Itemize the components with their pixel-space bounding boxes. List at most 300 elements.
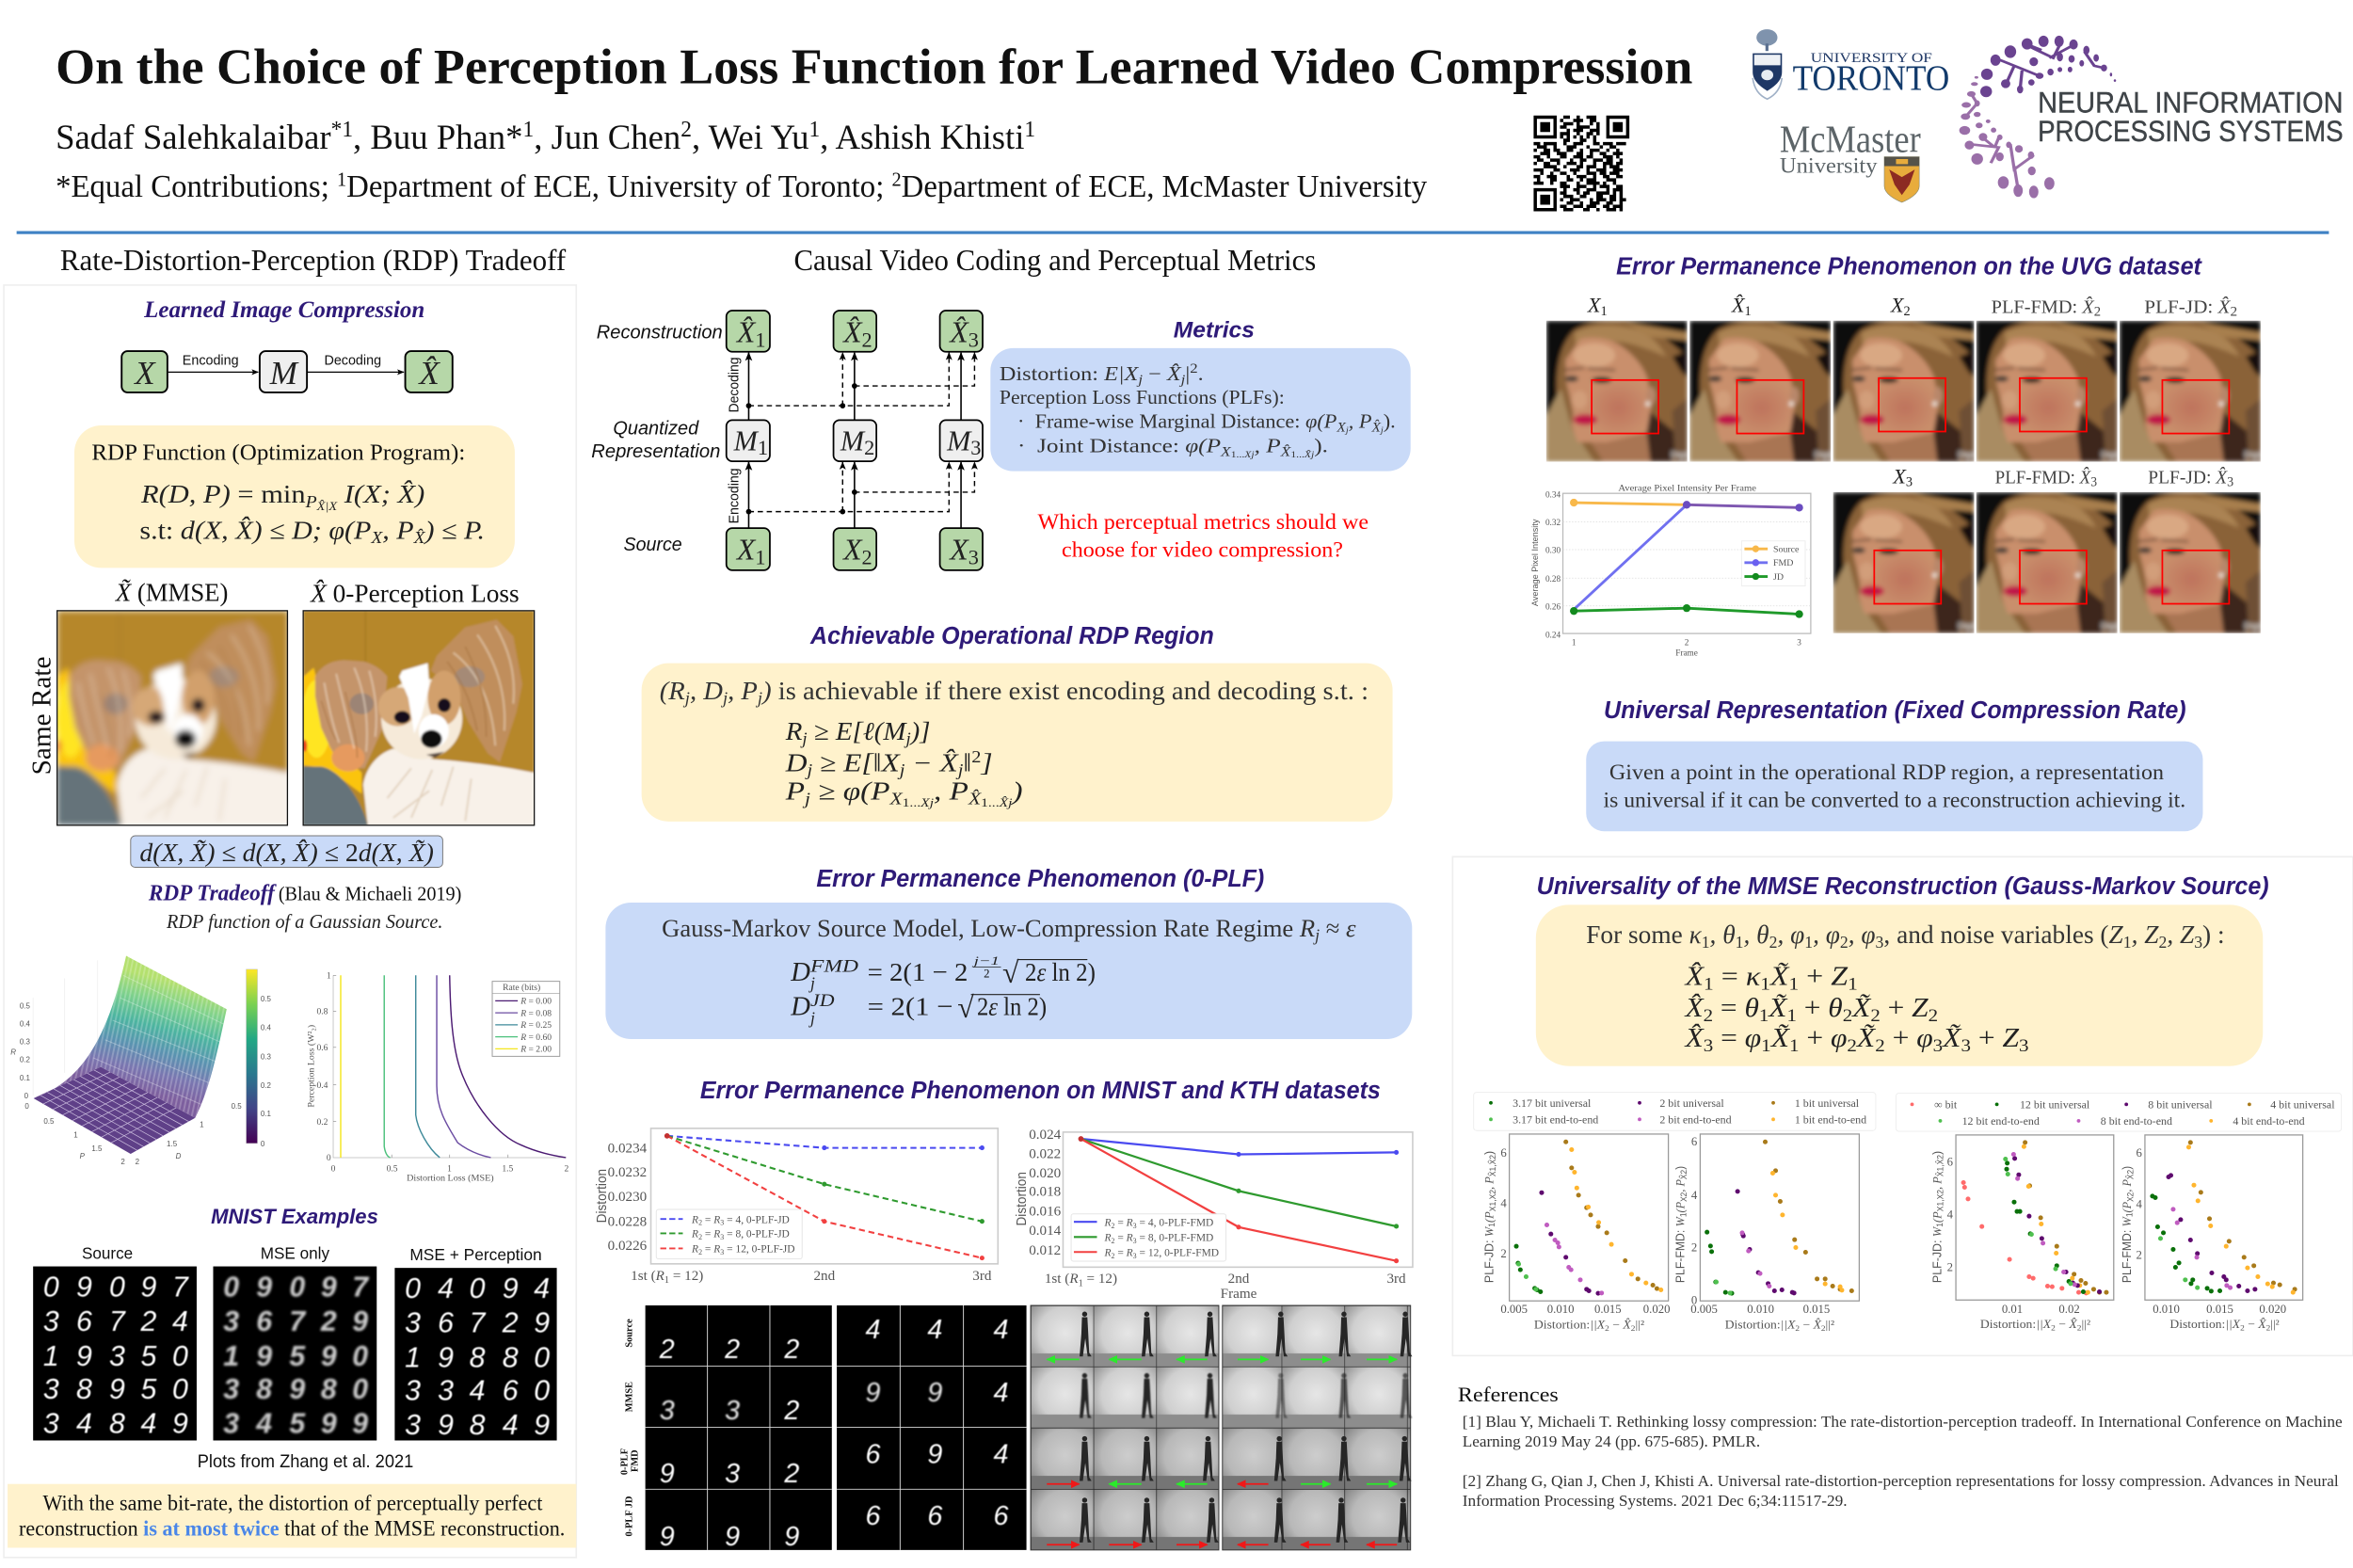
callout: RDP function: I(X; X̂)	[337, 480, 424, 508]
chart: distortion FMD: 1	[1079, 1278, 1083, 1288]
chart: average pixel intensity: 0.26	[1545, 601, 1561, 611]
chart: scatter JD left: 0.015	[1594, 1303, 1622, 1316]
label: MMSE image: X̃ (MMSE)	[115, 579, 228, 607]
colorbar: 0.5	[261, 995, 272, 1003]
panel: rate-distortion-perception tradeoff	[4, 285, 576, 1558]
chart: distortion perception curves: R = 0.60	[520, 1032, 552, 1043]
diagram: causal video coding: X	[950, 534, 968, 567]
colorbar: 0.3	[261, 1053, 272, 1062]
chart: scatter FMD right: 2	[2137, 1249, 2142, 1262]
chart: scatter JD left: 4	[1500, 1197, 1507, 1210]
callout: metrics: , P	[1255, 437, 1281, 457]
chart: 3D RDP surface: P	[80, 1152, 86, 1160]
chart: distortion perception curves: 0.8	[316, 1007, 328, 1017]
chart: scatter FMD right: 1	[2125, 1212, 2135, 1217]
chart: distortion FMD: R	[1103, 1247, 1111, 1258]
image: MNIST sequences left: 222	[659, 1335, 799, 1365]
callout: gauss-markov universality: X̂	[1685, 962, 1702, 992]
chart: distortion FMD: 2nd	[1228, 1272, 1250, 1287]
callout: gauss-markov universality: =	[1713, 1023, 1745, 1053]
logo: McMaster University: University	[1780, 152, 1878, 177]
chart: scatter FMD left: −	[1800, 1319, 1814, 1332]
callout: gauss-markov: 2ε ln 2)	[977, 993, 1047, 1022]
chart: scatter JD right: 2	[2051, 1322, 2056, 1332]
diagram: encoder decoder	[121, 351, 453, 392]
callout: gauss-markov universality: +	[1885, 1023, 1916, 1053]
question in red: choose for video compression?	[1062, 536, 1343, 561]
diagram: encoder decoder: X̂	[417, 355, 440, 392]
image: MNIST source grid: 19350	[43, 1341, 188, 1372]
row labels for image grid: 0-PLF JD	[624, 1496, 634, 1537]
chart: distortion JD: 2	[698, 1233, 702, 1241]
chart: distortion FMD: 0.018	[1029, 1185, 1061, 1200]
heading: RDP tradeoff: RDP Tradeoff	[148, 882, 277, 906]
diagram: encoder decoder: M	[269, 355, 299, 392]
chart: average pixel intensity: Average Pixel Intensity Per Frame	[1618, 483, 1757, 493]
callout: metrics: X	[1220, 445, 1232, 460]
chart: scatter FMD left: 0.010	[1747, 1303, 1774, 1316]
QR code	[1533, 116, 1629, 211]
chart: scatter JD left: 2	[1500, 1247, 1507, 1260]
authors: 2	[680, 118, 692, 142]
question in red: Which perceptual metrics should we	[1038, 509, 1369, 534]
panel: universality of the MMSE reconstruction	[1452, 856, 2353, 1355]
chart: distortion JD: 2nd	[813, 1269, 836, 1284]
chart: scatter FMD right	[2120, 1135, 2303, 1332]
chart: scatter JD right	[1929, 1135, 2114, 1332]
formula: distortion bound: d(X, X̃) ≤ d(X, X̂) ≤ 2d(X, X̃)	[139, 839, 434, 867]
chart: distortion JD: 0.0232	[608, 1165, 647, 1180]
callout: gauss-markov universality: 2	[1843, 1006, 1852, 1026]
diagram: causal video coding: Source	[624, 535, 682, 555]
image labels row one: PLF-FMD: X̂	[1992, 296, 2093, 317]
chart: distortion perception curves: R = 0.00	[520, 997, 552, 1007]
chart: distortion JD: 1	[664, 1275, 669, 1286]
chart: scatter FMD left: 0.005	[1690, 1303, 1718, 1316]
callout: RDP function: ) ≤ P.	[423, 516, 485, 544]
callout: gauss-markov universality: 1	[1804, 933, 1813, 952]
diagram: encoder decoder: Encoding	[183, 352, 239, 368]
chart: distortion FMD: = 12)	[1083, 1272, 1117, 1287]
diagram: causal video coding: X̂	[950, 315, 968, 348]
callout: metrics: j	[1379, 425, 1384, 436]
legend: left scatter: 1 bit end-to-end	[1795, 1112, 1866, 1126]
chart: scatter FMD right: (P	[2121, 1202, 2134, 1212]
callout: gauss-markov: 2	[984, 968, 990, 981]
chart: distortion JD: = 4, 0-PLF-JD	[724, 1214, 790, 1225]
diagram: causal video coding: 3	[970, 436, 981, 459]
callout: metrics: |	[1185, 364, 1190, 385]
callout: achievable region: ≥ E[‖X	[812, 748, 901, 776]
image: MNIST source grid: 34849	[43, 1409, 188, 1440]
label: same rate: Same Rate	[27, 656, 57, 775]
colorbar: 0	[261, 1140, 265, 1148]
caption: gaussian source: RDP function of a Gaussian Source.	[166, 912, 442, 933]
callout: at most twice: With the same bit-rate, the distortion of perceptually perfect	[43, 1491, 543, 1515]
chart: distortion JD	[594, 1128, 998, 1286]
chart: scatter JD left	[1481, 1134, 1671, 1333]
chart: scatter JD right: )	[1929, 1151, 1944, 1155]
callout: metrics: , P	[1349, 411, 1372, 432]
callout: metrics: 1...	[1290, 450, 1305, 460]
diagram: causal video coding: Reconstruction	[597, 323, 723, 344]
callout: gauss-markov universality: X̃	[1856, 1023, 1877, 1053]
chart: scatter JD left: 6	[1500, 1146, 1507, 1160]
callout: achievable region: , P	[934, 777, 968, 806]
chart: scatter JD right: (P	[1930, 1211, 1944, 1223]
image: MNIST sequences left: 999	[660, 1522, 799, 1552]
chart: distortion perception curves: R = 0.08	[520, 1008, 552, 1018]
chart: scatter FMD right: PLF-FMD: W	[2120, 1217, 2134, 1283]
callout: gauss-markov universality: 1	[2123, 933, 2132, 952]
chart: distortion FMD: 1st (R	[1045, 1272, 1079, 1287]
diagram: causal video coding: Representation	[591, 441, 720, 462]
callout: metrics: · Joint Distance: φ(P	[1017, 437, 1214, 457]
authors: 1	[1024, 118, 1035, 142]
callout: gauss-markov universality: X̂	[1685, 993, 1702, 1023]
chart: distortion FMD: 3	[1133, 1252, 1137, 1260]
chart: distortion JD: 3	[720, 1233, 724, 1241]
image labels row one: 2	[2094, 305, 2101, 320]
row labels for image grid	[620, 1319, 641, 1537]
references: Information Processing Systems. 2021 Dec 6;34:11517-29.	[1463, 1492, 1848, 1510]
chart: 3D RDP surface: 0.1	[20, 1074, 30, 1082]
image: MNIST perception grid: 33460	[405, 1375, 550, 1406]
references	[1458, 1383, 2343, 1510]
affiliations: Department of ECE, University of Toronto;	[346, 169, 892, 204]
callout: achievable region: j	[756, 689, 762, 708]
callout: gauss-markov universality: 3	[1876, 933, 1884, 952]
chart: scatter FMD right: ||²	[2270, 1318, 2280, 1331]
chart: distortion JD: 2	[698, 1219, 702, 1227]
chart: scatter FMD right: Distortion: ||X	[2169, 1318, 2239, 1331]
image: MNIST source grid: 38950	[43, 1374, 188, 1405]
callout: gauss-markov universality: X̃	[1770, 1023, 1791, 1053]
chart: scatter JD right: X̂	[2068, 1318, 2078, 1331]
chart: 3D RDP surface: 0.3	[20, 1038, 30, 1047]
chart: scatter JD left: X̂1,X̂2	[1487, 1155, 1497, 1176]
chart: scatter FMD right: 4	[2137, 1197, 2143, 1210]
callout: RDP function: R(D, P) = min	[141, 480, 298, 508]
callout: gauss-markov universality: 2	[1704, 1006, 1713, 1026]
chart: scatter FMD left: )	[1673, 1166, 1688, 1170]
chart: distortion JD: =	[702, 1228, 713, 1240]
chart: distortion FMD: = 12, 0-PLF-FMD	[1137, 1247, 1219, 1258]
chart: average pixel intensity: Frame	[1675, 648, 1698, 658]
callout: gauss-markov universality: , and noise variables (	[1883, 920, 2109, 949]
callout: gauss-markov universality: =	[1714, 962, 1746, 992]
callout: gauss-markov universality: 1	[1704, 974, 1714, 994]
legend: right scatter	[1896, 1093, 2342, 1131]
chart: scatter FMD right: −	[2245, 1318, 2258, 1331]
callout: achievable region: )	[1010, 777, 1023, 806]
image labels row two: X	[1893, 464, 1906, 488]
chart: distortion FMD: Frame	[1221, 1287, 1257, 1302]
callout: gauss-markov universality: Z	[1912, 993, 1927, 1023]
chart: distortion JD: R	[691, 1214, 698, 1225]
callout: gauss-markov universality: 1	[1761, 1036, 1771, 1056]
chart: distortion FMD: 0.024	[1029, 1128, 1062, 1143]
callout: gauss-markov universality: 2	[1847, 1036, 1857, 1056]
callout: achievable region: Xj	[920, 796, 935, 809]
chart: scatter FMD right: 2	[2266, 1322, 2270, 1332]
chart: scatter JD left: 2	[1605, 1323, 1609, 1333]
callout: gauss-markov: = 2(1 − 2	[868, 958, 968, 987]
chart: scatter JD right: , P	[1930, 1176, 1944, 1190]
references: Learning 2019 May 24 (pp. 675-685). PMLR.	[1463, 1432, 1760, 1450]
chart: scatter JD right: Distortion: ||X	[1980, 1318, 2050, 1331]
diagram: causal video coding: X̂	[843, 315, 862, 348]
chart: distortion FMD: R	[1126, 1247, 1133, 1258]
callout: achievable region: , D	[690, 677, 723, 705]
chart: average pixel intensity: 0.24	[1545, 631, 1561, 640]
image labels row two: 3	[2227, 475, 2233, 490]
callout: gauss-markov: j	[808, 1008, 815, 1027]
callout: RDP function: X̂	[413, 528, 426, 547]
callout: universal definition: is universal if it can be converted to a reconstruction achieving it.	[1604, 788, 2185, 812]
chart: average pixel intensity: 3	[1797, 638, 1801, 648]
diagram: encoder decoder: Decoding	[324, 352, 381, 368]
colorbar	[247, 969, 272, 1148]
chart: scatter JD right: 2	[2077, 1322, 2081, 1332]
chart: scatter FMD left: 2	[1795, 1323, 1800, 1333]
chart: distortion JD: Distortion	[594, 1169, 610, 1223]
image: KTH walking sequences	[1031, 1305, 1412, 1550]
chart: distortion FMD: R	[1126, 1218, 1133, 1229]
diagram: causal video coding: 2	[864, 436, 874, 459]
callout: gauss-markov universality: θ	[1744, 993, 1758, 1023]
heading: learned image compression: Learned Image Compression	[143, 296, 424, 323]
callout: gauss-markov universality: For some κ	[1586, 920, 1702, 949]
callout: gauss-markov: j	[808, 974, 815, 993]
callout: gauss-markov: = 2(1 −	[868, 993, 952, 1022]
diagram: causal video coding	[591, 311, 983, 570]
callout: gauss-markov universality: 3	[2194, 933, 2202, 952]
image: MNIST sequences left: 2	[783, 1396, 799, 1426]
image: MNIST sequences right	[837, 1305, 1027, 1550]
callout: RDP function: s.t: d(X, X̂) ≤ D; φ(P	[139, 516, 352, 544]
image labels row two: 3	[1906, 475, 1913, 490]
colorbar: 0.4	[261, 1023, 272, 1032]
callout: metrics: · Frame-wise Marginal Distance: φ(P	[1017, 411, 1335, 432]
chart: 3D RDP surface: 0	[24, 1092, 29, 1100]
image: MMSE dog	[56, 611, 288, 825]
chart: scatter FMD left: Distortion: ||X	[1725, 1319, 1794, 1332]
chart: 3D RDP surface: 0.4	[20, 1019, 30, 1028]
image: MNIST source grid: 09097	[43, 1272, 189, 1303]
callout: achievable region: 1...	[981, 796, 1000, 809]
callout: metrics: X̂j	[1304, 449, 1315, 460]
chart: scatter FMD left: 2	[1821, 1323, 1826, 1333]
chart: distortion perception curves: 0	[331, 1163, 336, 1174]
chart: scatter JD left: , P	[1482, 1176, 1496, 1190]
chart: 3D RDP surface: D	[176, 1152, 182, 1160]
chart: scatter JD left: Distortion: ||X	[1534, 1319, 1604, 1332]
chart: 3D RDP surface: 1.5	[167, 1140, 178, 1148]
chart: scatter FMD left: 0.015	[1803, 1303, 1830, 1316]
heading: metrics: Metrics	[1174, 318, 1255, 344]
legend: left scatter: 3.17 bit end-to-end	[1513, 1112, 1598, 1126]
chart: scatter FMD left: , P	[1674, 1179, 1688, 1192]
callout: gauss-markov universality: , φ	[1777, 920, 1804, 949]
row labels for image grid: FMD	[631, 1449, 641, 1472]
authors: , Buu Phan*	[353, 119, 523, 157]
chart: average pixel intensity: Source	[1773, 545, 1800, 555]
label: perception image: X̂ 0-Perception Loss	[310, 579, 520, 607]
chart: distortion perception curves: Distortion Loss (MSE)	[407, 1174, 494, 1184]
references: [2] Zhang G, Qian J, Chen J, Khisti A. Universal rate-distortion-perception representations for lossy compression. Advances in Neural	[1463, 1472, 2339, 1490]
chart: distortion perception curves: 1	[447, 1163, 452, 1174]
chart: scatter JD left: −	[1609, 1319, 1623, 1332]
chart: scatter FMD right: X2	[2125, 1192, 2135, 1202]
callout: metrics: Distortion: E|X	[1000, 364, 1133, 385]
chart: scatter JD right: X1,X2	[1936, 1190, 1945, 1211]
chart: distortion FMD: =	[1114, 1218, 1127, 1229]
heading: universal representation: Universal Representation (Fixed Compression Rate)	[1604, 697, 2186, 724]
chart: distortion FMD: 3rd	[1386, 1272, 1406, 1287]
callout: achievable region: ≥ φ(P	[810, 777, 890, 806]
column heading: RDP tradeoff: Rate-Distortion-Perception (RDP) Tradeoff	[60, 244, 566, 277]
callout: metrics: Perception Loss Functions (PLFs):	[1000, 388, 1285, 408]
chart: distortion JD: 3rd	[972, 1269, 992, 1284]
callout: achievable region: ≥ E[ℓ(M	[808, 717, 907, 745]
chart: 3D RDP surface: 0.5	[43, 1117, 55, 1126]
chart: distortion FMD: = 8, 0-PLF-FMD	[1137, 1232, 1213, 1243]
callout: RDP function	[74, 425, 515, 568]
chart: scatter FMD right: 0.010	[2153, 1303, 2180, 1316]
image: MNIST MSE grid: 36729	[223, 1306, 368, 1337]
image: MNIST MSE grid: 38980	[223, 1374, 368, 1405]
callout: gauss-markov universality: +	[1799, 962, 1831, 992]
callout: achievable region: ]	[980, 748, 993, 776]
callout: metrics: ).	[1314, 437, 1328, 457]
callout: metrics: ).	[1384, 411, 1396, 432]
chart: distortion FMD: Distortion	[1014, 1172, 1030, 1226]
callout: achievable region: j	[683, 689, 690, 708]
callout: achievable region: j	[805, 760, 812, 779]
chart: distortion FMD: R	[1103, 1218, 1111, 1229]
chart: scatter FMD left	[1673, 1134, 1859, 1333]
callout: gauss-markov universality: ) :	[2202, 920, 2225, 949]
row labels for image grid: MMSE	[624, 1382, 634, 1412]
callout: gauss-markov universality: , θ	[1710, 920, 1736, 949]
chart: scatter JD left: 0.005	[1500, 1303, 1528, 1316]
chart: scatter JD right: −	[2056, 1318, 2069, 1331]
chart: distortion FMD: 0.020	[1029, 1166, 1061, 1181]
authors: , Jun Chen	[534, 119, 681, 157]
chart: scatter JD left: 2	[1631, 1323, 1635, 1333]
chart: scatter FMD left: PLF-FMD: W	[1673, 1217, 1688, 1283]
chart: 3D RDP surface: 1	[200, 1120, 204, 1128]
callout: gauss-markov universality: +	[1797, 993, 1828, 1023]
image: MNIST sequences left: 932	[660, 1459, 799, 1489]
callout: achievable region: , P	[728, 677, 758, 705]
callout: gauss-markov universality: X̃	[1851, 993, 1872, 1023]
image: MNIST sequences right: 694	[865, 1439, 1008, 1469]
row labels for image grid: 0-PLF	[620, 1448, 631, 1475]
diagram: causal video coding: Decoding	[726, 357, 742, 412]
callout: gauss-markov universality: φ	[1916, 1023, 1931, 1053]
callout: metrics: .	[1198, 364, 1204, 385]
chart: average pixel intensity: 0.32	[1545, 518, 1561, 527]
callout: achievable region: 2	[971, 747, 981, 766]
callout: gauss-markov: √	[1002, 956, 1019, 989]
chart: scatter JD right: 0.02	[2058, 1303, 2080, 1316]
authors: 1	[523, 118, 534, 142]
legend: left scatter: 1 bit universal	[1795, 1096, 1860, 1110]
chart: scatter FMD right: )	[2120, 1166, 2134, 1170]
callout: achievable region: − X̂	[904, 748, 959, 776]
image row: UVG frames three	[1833, 492, 2261, 633]
chart: distortion JD: 1st (R	[631, 1269, 664, 1284]
callout: gauss-markov universality: 1	[1736, 933, 1744, 952]
callout: RDP function: P	[305, 492, 317, 511]
chart: scatter FMD left: 1	[1678, 1212, 1688, 1217]
chart: average pixel intensity: 0.28	[1545, 574, 1561, 584]
legend: left scatter: 2 bit end-to-end	[1659, 1112, 1732, 1126]
label: source: Source	[82, 1244, 133, 1263]
chart: scatter JD left: PLF-JD: W	[1481, 1226, 1496, 1283]
chart: 3D RDP surface: 2	[136, 1158, 140, 1166]
chart: scatter JD left: X1,X2	[1488, 1190, 1497, 1211]
chart: distortion perception curves: Rate (bits)	[503, 983, 540, 993]
callout: gauss-markov universality: 2	[1840, 933, 1849, 952]
diagram: causal video coding: X	[843, 534, 862, 567]
callout: achievable region: j	[904, 729, 911, 748]
chart: average pixel intensity: 0.30	[1545, 545, 1561, 554]
chart: distortion JD: =	[702, 1214, 713, 1225]
callout: universal definition: Given a point in the operational RDP region, a representation	[1609, 760, 2164, 784]
callout: gauss-markov universality: X̃	[1768, 993, 1788, 1023]
callout: achievable region: D	[786, 748, 804, 776]
legend: left scatter	[1474, 1093, 1876, 1130]
chart: average pixel intensity: 2	[1685, 638, 1689, 648]
chart: distortion perception curves: Perception Loss (W²₂)	[306, 1025, 316, 1108]
logo: NeurIPS	[1960, 36, 2344, 199]
image labels row one: X	[1588, 294, 1600, 317]
image labels row two: PLF-JD: X̂	[2148, 467, 2227, 488]
callout: metrics: 2	[1190, 361, 1198, 376]
legend: right scatter: 4 bit universal	[2270, 1097, 2335, 1111]
chart: scatter JD left: (P	[1482, 1211, 1496, 1223]
callout: gauss-markov universality: +	[1971, 1023, 2002, 1053]
callout: gauss-markov: Gauss-Markov Source Model, Low-Compression Rate Regime R	[662, 915, 1315, 942]
callout: gauss-markov universality: 1	[1702, 933, 1710, 952]
callout: gauss-markov: FMD	[809, 956, 858, 976]
caption: plots source: Plots from Zhang et al. 2021	[198, 1452, 413, 1472]
image: perceptual dog	[302, 611, 535, 825]
callout: at most twice	[8, 1484, 576, 1547]
image labels row one: X	[1891, 294, 1903, 317]
callout: gauss-markov universality: Z	[2109, 920, 2124, 949]
chart: distortion FMD: 0.022	[1029, 1146, 1061, 1161]
chart: distortion FMD: 3	[1133, 1237, 1137, 1245]
callout: metrics: Xj	[1243, 450, 1255, 460]
chart: distortion JD: = 12)	[669, 1269, 703, 1284]
image: MNIST sequences right: 666	[865, 1501, 1008, 1531]
chart: distortion FMD: R	[1126, 1232, 1133, 1243]
image labels row one: 1	[1600, 304, 1608, 319]
chart: distortion JD: R	[712, 1228, 720, 1240]
chart: distortion FMD: 2	[1111, 1252, 1114, 1260]
affiliations: Department of ECE, McMaster University	[902, 169, 1427, 204]
image: MNIST sequences right: 4	[993, 1378, 1008, 1408]
callout: gauss-markov: j−1	[971, 954, 1000, 968]
image: MNIST source grid	[33, 1267, 197, 1440]
callout: achievable region	[642, 664, 1393, 822]
chart: scatter JD right: ||²	[2081, 1318, 2090, 1331]
chart: scatter JD left: ||²	[1635, 1319, 1644, 1332]
